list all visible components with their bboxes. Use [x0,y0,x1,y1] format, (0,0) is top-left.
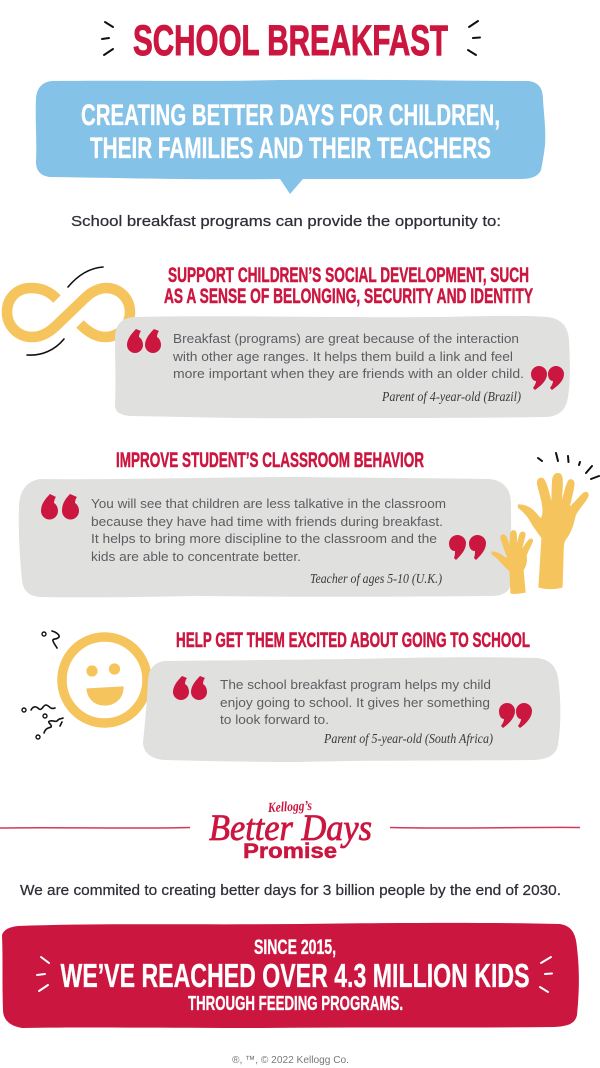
open quote mark [173,676,207,700]
footer: ®, ™, © 2022 Kellogg Co. [232,1054,349,1066]
title text: SCHOOL BREAKFAST [133,17,448,65]
icon: left sparks [37,957,49,991]
panel: classroom behavior: kids are able to concentrate better. [91,549,301,564]
close quote mark [531,366,564,390]
icon: right sparks [540,957,552,992]
left rule [0,826,190,829]
open quote mark [127,329,161,353]
title [102,17,480,65]
heading: IMPROVE STUDENT’S CLASSROOM BEHAVIOR [116,449,424,472]
logo: Better Days Promise [0,799,580,863]
panel: classroom behavior: It helps to bring more discipline to the classroom and the [91,531,437,546]
attribution: Teacher of ages 5-10 (U.K.) [310,572,442,587]
intro text: School breakfast programs can provide the opportunity to: [71,213,501,230]
banner shape [2,923,579,1028]
icon: left sparks [102,22,113,55]
icon: smiley face [62,637,147,723]
attribution: Parent of 4-year-old (Brazil) [381,390,521,405]
panel: red banner: THROUGH FEEDING PROGRAMS. [188,993,403,1015]
quote text: Breakfast (programs) are great because of the interaction [173,331,519,346]
quote card [115,316,570,418]
panel: social development: more important when they are friends with an older child. [173,366,524,381]
icon: right sparks [468,21,480,55]
banner text: SINCE 2015, [254,936,336,959]
icon: infinity [7,267,130,355]
Promise: Promise [243,840,337,863]
close quote mark [499,703,532,728]
panel: excited about school: enjoy going to school. It gives her something [220,695,490,710]
open quote mark [41,494,79,520]
panel: social development: with other age ranges. It helps them build a link and feel [172,349,513,364]
Kellogg's script: Kellogg’s [267,799,313,816]
quote card [143,657,560,762]
panel: classroom behavior: because they have had time with friends during breakfast. [91,514,443,529]
icon: doodles [22,631,63,739]
Better Days script: Better Days [209,808,372,849]
speech bubble [36,80,545,194]
panel: excited about school: to look forward to. [220,712,329,727]
quote text: The school breakfast program helps my child [220,677,491,692]
close quote mark [449,535,486,560]
panel: red banner [2,923,579,1028]
bubble shape [36,80,545,194]
commitment text: We are commited to creating better days for 3 billion people by the end of 2030. [20,882,561,899]
attribution: Parent of 5-year-old (South Africa) [323,732,493,747]
right rule [390,826,580,829]
quote text: You will see that children are less talkative in the classroom [91,496,446,511]
icon: raised hands [492,453,599,593]
panel: excited about school [22,629,560,762]
quote card [19,477,511,597]
panel: social development [7,264,570,418]
panel: classroom behavior [19,449,599,597]
